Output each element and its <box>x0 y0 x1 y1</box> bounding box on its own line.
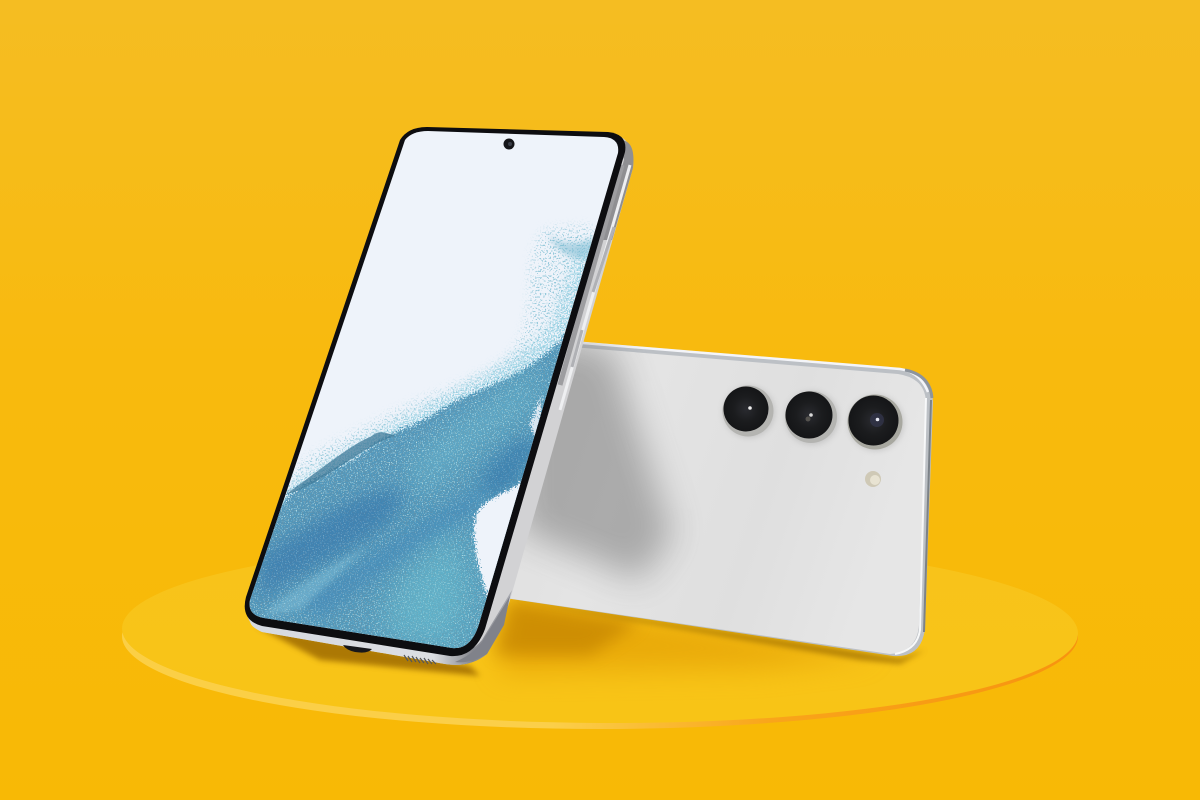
speaker grille <box>404 655 436 664</box>
wave accent near top <box>548 235 595 259</box>
floor shadows <box>256 598 925 676</box>
bright rail <box>560 165 630 410</box>
lower right corner tint <box>455 596 510 662</box>
lower frame <box>250 590 512 665</box>
dark ripple <box>258 490 405 600</box>
platform disc <box>122 536 1078 729</box>
volume button <box>572 330 582 367</box>
screen <box>250 131 618 648</box>
back phone <box>505 335 933 656</box>
black bezel <box>245 127 625 656</box>
flash <box>865 471 881 487</box>
shading from front phone <box>520 335 672 580</box>
power button <box>593 227 614 292</box>
metal frame <box>246 128 633 665</box>
light teal upper <box>409 366 537 488</box>
top edge highlight <box>583 343 928 392</box>
main camera lens right <box>848 394 904 451</box>
back panel <box>505 346 926 654</box>
main camera lens left <box>722 386 775 438</box>
small white fringe <box>530 395 542 445</box>
corner tint <box>905 370 932 398</box>
wave sparse spray <box>262 226 610 560</box>
dark patch upper right <box>480 437 540 500</box>
front phone <box>235 120 640 670</box>
front camera <box>504 138 514 150</box>
platform rim <box>122 543 1078 729</box>
darker diagonal <box>300 480 490 620</box>
back phone body <box>505 340 933 656</box>
main camera lens middle <box>785 391 839 445</box>
grey inner strip <box>560 165 622 385</box>
white notch <box>471 478 522 598</box>
platform top <box>122 536 1078 726</box>
light streak lower left <box>266 550 362 616</box>
upper dark shoulder <box>600 140 633 240</box>
wave solid body <box>250 328 566 648</box>
right edge <box>895 398 926 654</box>
usb port <box>343 645 372 653</box>
wave dense spray <box>275 240 605 520</box>
wave crest streak <box>285 432 396 495</box>
screen background <box>250 131 618 648</box>
light teal lower area <box>380 530 470 645</box>
